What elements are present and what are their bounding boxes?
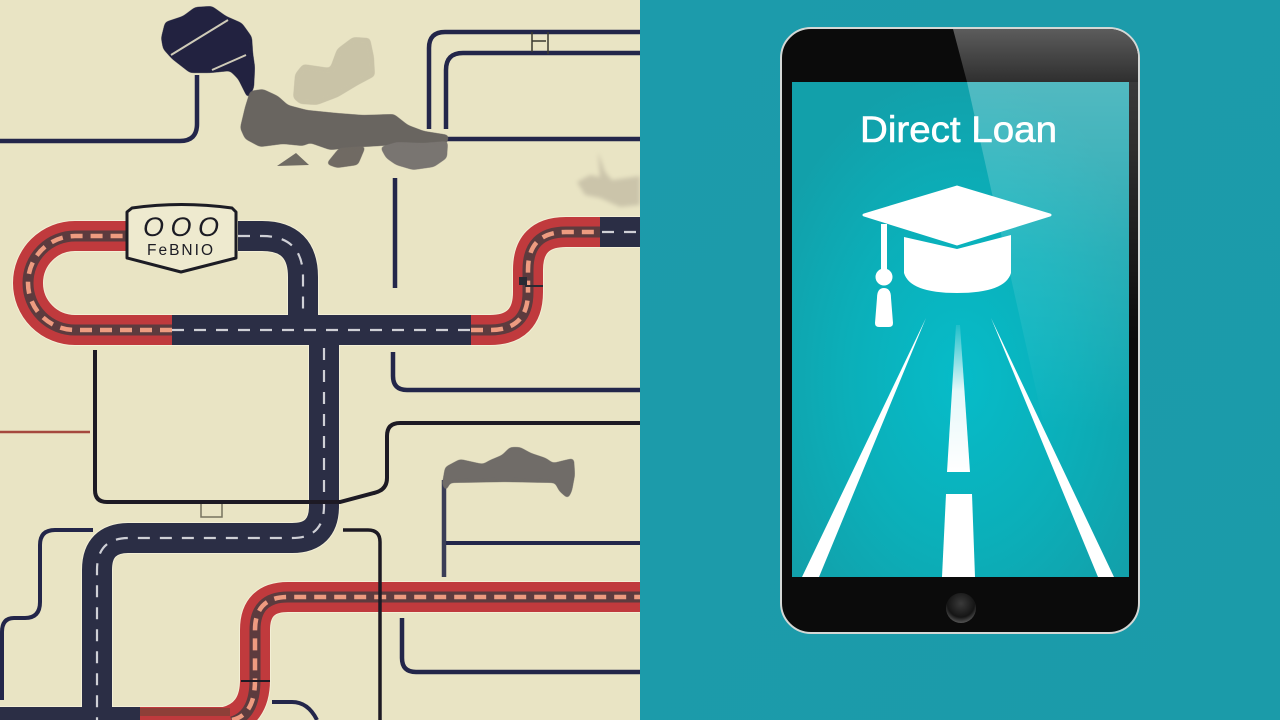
phone body xyxy=(781,28,1139,633)
thin route lines xyxy=(0,32,640,720)
crossing lines over roads xyxy=(95,277,640,720)
ink blot: faded right xyxy=(577,152,640,207)
shield sign xyxy=(127,204,236,272)
phone xyxy=(781,28,1139,633)
glass reflection on bezel xyxy=(953,29,1138,296)
panel: roadmap illustration xyxy=(0,0,645,720)
road lines xyxy=(802,318,1114,577)
ink blot: lower grey xyxy=(442,447,575,499)
shield sign: FeBNIO xyxy=(147,242,213,259)
dark road: loop and junction xyxy=(0,232,645,720)
panel: teal background xyxy=(640,0,1280,720)
screen xyxy=(792,82,1129,577)
ink blot: grey wash xyxy=(240,37,449,170)
icon: graduation cap xyxy=(864,187,1050,327)
shield sign: OOO xyxy=(143,212,219,242)
home button xyxy=(946,593,976,623)
red road segments xyxy=(28,232,645,720)
ink blot: dark xyxy=(161,6,255,99)
heading: Direct Loan xyxy=(860,109,1057,150)
